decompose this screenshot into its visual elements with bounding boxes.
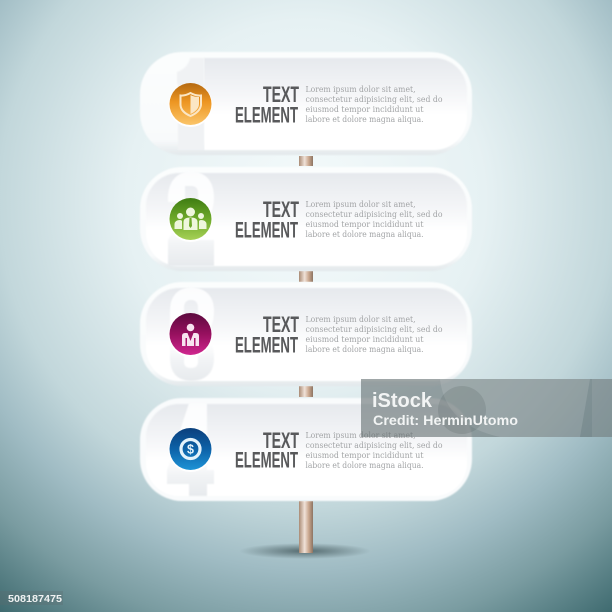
panel 3 body text: Lorem ipsum dolor sit amet, (306, 314, 416, 324)
panel 3 icon: person (168, 313, 212, 357)
panel 4 frame (140, 398, 472, 501)
panel 3 (140, 282, 472, 386)
panel 4 numeral (167, 403, 214, 496)
panel 2: consectetur adipisicing elit, sed do (306, 209, 442, 219)
panel 1: eiusmod tempor incididunt ut (306, 104, 424, 114)
panel 2 body text: Lorem ipsum dolor sit amet, (306, 199, 416, 209)
panel 3 numeral (170, 287, 214, 381)
panel 1 icon: shield (168, 83, 212, 127)
panel 2 icon: people (168, 198, 212, 242)
panel 3: consectetur adipisicing elit, sed do (306, 324, 442, 334)
panel 2: eiusmod tempor incididunt ut (306, 219, 424, 229)
panel 4: consectetur adipisicing elit, sed do (306, 440, 442, 450)
panel 1 frame (140, 52, 472, 155)
panel 4 inner plate (146, 404, 467, 496)
panel 2: ELEMENT (235, 218, 298, 242)
panel 2 inner plate (146, 173, 467, 266)
panel 1: consectetur adipisicing elit, sed do (306, 94, 442, 104)
panel 1 heading: TEXT (263, 82, 299, 107)
panel 2 heading: TEXT (263, 197, 299, 222)
panel 3: eiusmod tempor incididunt ut (306, 334, 424, 344)
watermark credit: Credit: HerminUtomo (373, 413, 518, 428)
sign post (299, 156, 313, 553)
panel 1 inner plate (204, 58, 467, 150)
panel 2 frame (140, 167, 472, 271)
panel 4 heading: TEXT (263, 428, 299, 453)
panel 1 body text: Lorem ipsum dolor sit amet, (306, 84, 416, 94)
panel 4: ELEMENT (235, 448, 298, 472)
panel 1 numeral (177, 58, 204, 150)
watermark logo: iStock (372, 389, 433, 412)
panel 2 (140, 167, 472, 271)
panel 3 heading: TEXT (263, 312, 299, 337)
panel 3 frame (140, 282, 472, 386)
panel 4 icon: dollar coin (168, 428, 212, 472)
panel 4 icon: dollar coin: $ (187, 442, 194, 456)
panel 4: labore et dolore magna aliqua. (306, 460, 424, 470)
panel 1: labore et dolore magna aliqua. (306, 114, 424, 124)
panel 2 numeral (168, 171, 214, 266)
panel 4 (140, 398, 472, 501)
image id: 508187475 (8, 593, 62, 605)
panel 4 body text: Lorem ipsum dolor sit amet, (306, 430, 416, 440)
panel 1: ELEMENT (235, 102, 298, 128)
watermark band (361, 379, 612, 437)
panel 3: ELEMENT (235, 332, 298, 358)
ground shadow (239, 543, 371, 559)
panel 2: labore et dolore magna aliqua. (306, 229, 424, 239)
panel 3 inner plate (146, 288, 467, 381)
panel 1 (140, 52, 472, 155)
panel 3: labore et dolore magna aliqua. (306, 344, 424, 354)
panel 4: eiusmod tempor incididunt ut (306, 450, 424, 460)
